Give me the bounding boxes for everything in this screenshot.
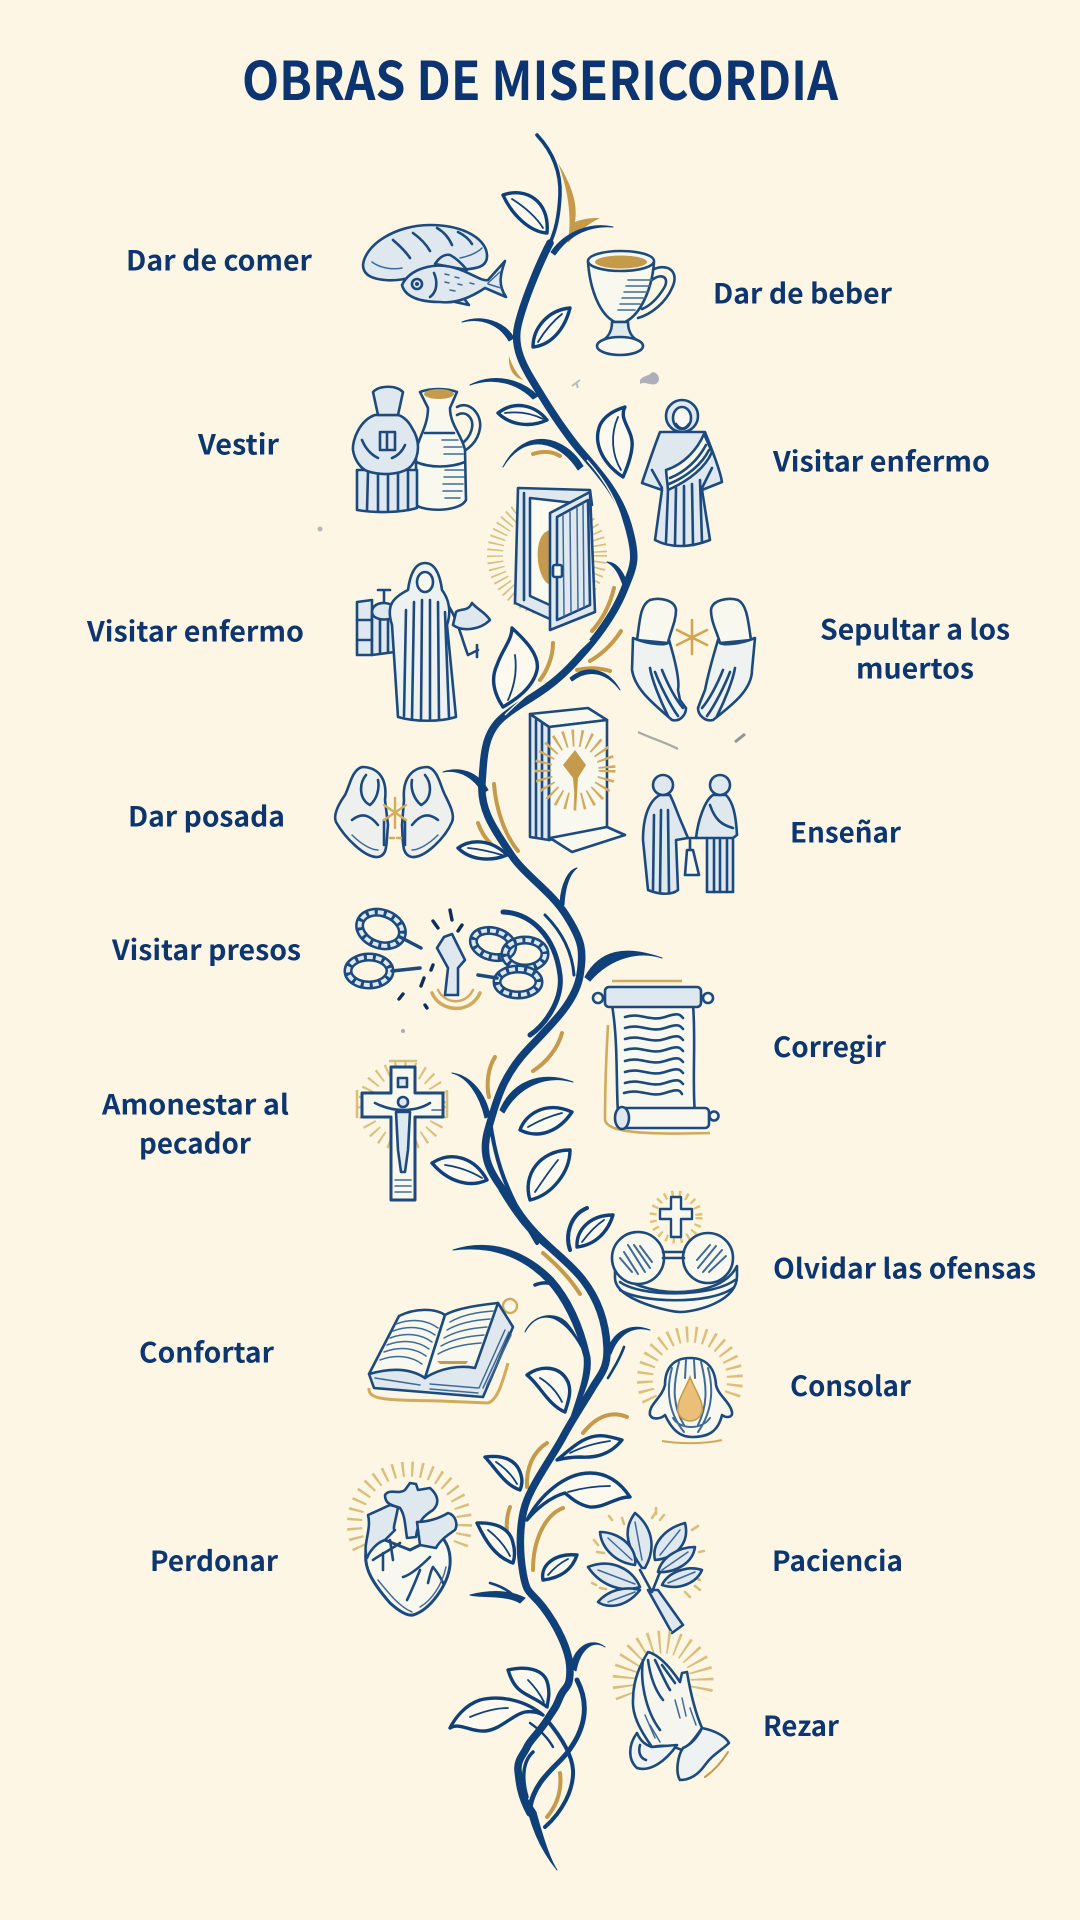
icon: book with glowing keyhole bbox=[530, 708, 625, 852]
icon: chalice with handle bbox=[588, 251, 675, 355]
label: Visitar presos: Visitar presos bbox=[111, 928, 301, 968]
label: Perdonar: Perdonar bbox=[150, 1539, 279, 1579]
label: Dar posada: Dar posada bbox=[128, 794, 285, 834]
icon: anatomical heart with rays bbox=[355, 1469, 465, 1615]
central vine bbox=[432, 135, 662, 1870]
secondary strands bbox=[453, 912, 590, 1827]
label: Vestir: Vestir bbox=[197, 422, 280, 462]
icon: two figures with a bag bbox=[643, 775, 737, 894]
icon: bread and fish bbox=[363, 225, 506, 305]
icon: clothing and jug bbox=[353, 387, 480, 512]
label: Sepultar a los muertos: Sepultar a los bbox=[820, 608, 1010, 648]
label: Confortar: Confortar bbox=[139, 1330, 275, 1370]
icon: woman with offerings bbox=[357, 563, 490, 721]
label: Visitar enfermo (left): Visitar enfermo bbox=[86, 610, 304, 650]
label: Dar de beber: Dar de beber bbox=[713, 272, 893, 312]
icon: flame with rays bbox=[645, 1334, 735, 1443]
label: Amonestar al pecador: Amonestar al bbox=[101, 1082, 289, 1122]
icon: open door with sun bbox=[495, 488, 599, 630]
vine leaves bbox=[432, 193, 632, 1731]
icon: broken chains bbox=[348, 906, 545, 1008]
label: Visitar enfermo (right): Visitar enfermo bbox=[772, 440, 990, 480]
title: OBRAS DE MISERICORDIA bbox=[242, 40, 839, 116]
label: Olvidar las ofensas: Olvidar las ofensas bbox=[773, 1246, 1036, 1286]
main stem bbox=[482, 135, 634, 1870]
label: Sepultar a los muertos: muertos bbox=[856, 646, 974, 686]
label: Amonestar al pecador: pecador bbox=[139, 1122, 252, 1162]
label: Paciencia: Paciencia bbox=[772, 1539, 903, 1579]
vine branches bbox=[443, 226, 662, 1671]
label: Amonestar al pecador bbox=[101, 1082, 289, 1162]
icon: praying hands bbox=[624, 1642, 729, 1780]
icon: scroll bbox=[593, 981, 718, 1134]
icon: open book bbox=[369, 1299, 517, 1403]
icon: two kneeling figures bbox=[335, 767, 453, 857]
label: Corregir: Corregir bbox=[773, 1025, 887, 1065]
label: Sepultar a los muertos bbox=[820, 608, 1010, 686]
label: Rezar: Rezar bbox=[763, 1704, 840, 1744]
icon: crucifix bbox=[357, 1061, 447, 1200]
gold accents of the vine bbox=[478, 163, 627, 1817]
icon: olive branch bbox=[588, 1508, 704, 1633]
icon: open hands with gold star bbox=[632, 599, 755, 720]
icon: robed saint bbox=[642, 400, 722, 546]
icon: cross over circular relics bbox=[612, 1194, 737, 1312]
label: Enseñar: Enseñar bbox=[790, 810, 902, 850]
label: Dar de comer: Dar de comer bbox=[126, 238, 313, 278]
label: Consolar: Consolar bbox=[790, 1364, 912, 1404]
